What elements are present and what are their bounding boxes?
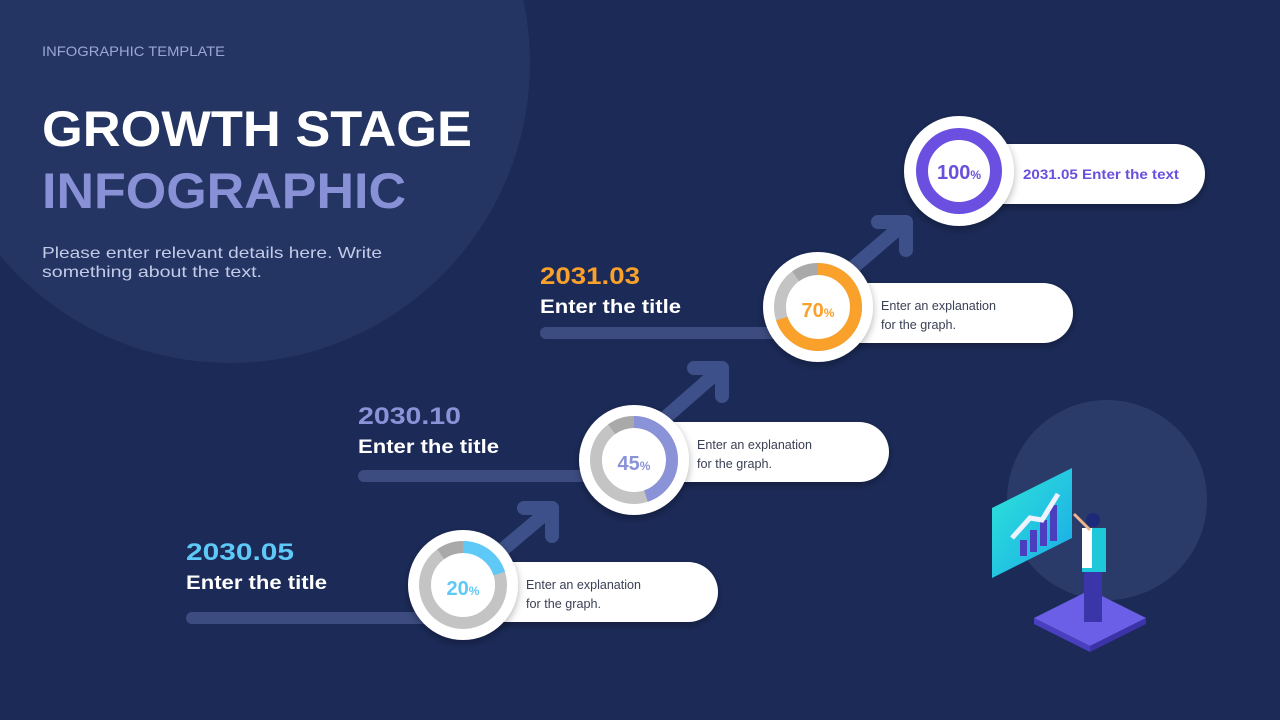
baseline bars: [192, 333, 785, 618]
title: [42, 101, 472, 219]
pill 3: [795, 283, 1073, 343]
pill 3: Enter an explanation: [881, 298, 996, 313]
title: GROWTH STAGE: [42, 101, 472, 157]
pill 2: for the graph.: [697, 456, 772, 471]
ring 20%: [408, 530, 518, 640]
stage 3 labels: 2031.03: [540, 263, 640, 290]
ring 70%: [763, 252, 873, 362]
ring 20%: 20%: [447, 578, 480, 600]
background circle: [0, 0, 530, 363]
pill 2: Enter an explanation: [697, 437, 812, 452]
subtitle text: Please enter relevant details here. Write: [42, 245, 382, 262]
ring 70%: 70%: [802, 300, 835, 322]
background circle small: [1007, 400, 1207, 600]
stage 2 labels: 2030.10: [358, 403, 461, 430]
stage 1 labels: [186, 539, 327, 594]
pill 3: for the graph.: [881, 317, 956, 332]
pill 1: Enter an explanation: [526, 577, 641, 592]
illustration: person with chart: [992, 468, 1146, 652]
stage 1 labels: Enter the title: [186, 573, 327, 594]
ring 45%: [579, 405, 689, 515]
subtitle text: something about the text.: [42, 264, 262, 281]
header label: INFOGRAPHIC TEMPLATE: [42, 43, 225, 59]
stage 3 labels: Enter the title: [540, 297, 681, 318]
pill 1: [440, 562, 718, 622]
ring 100%: [904, 116, 1014, 226]
pill 1: for the graph.: [526, 596, 601, 611]
pill 2: [610, 422, 889, 482]
arrows: [495, 222, 906, 556]
ring 100%: 100%: [937, 162, 981, 184]
stage 2 labels: Enter the title: [358, 437, 499, 458]
pill 4: [935, 144, 1205, 204]
stage 3 labels: [540, 263, 681, 318]
pill 4: 2031.05 Enter the text: [1023, 166, 1179, 182]
title: INFOGRAPHIC: [42, 163, 406, 219]
ring 45%: 45%: [618, 453, 651, 475]
stage 2 labels: [358, 403, 499, 458]
stage 1 labels: 2030.05: [186, 539, 294, 566]
subtitle text: [42, 245, 382, 281]
